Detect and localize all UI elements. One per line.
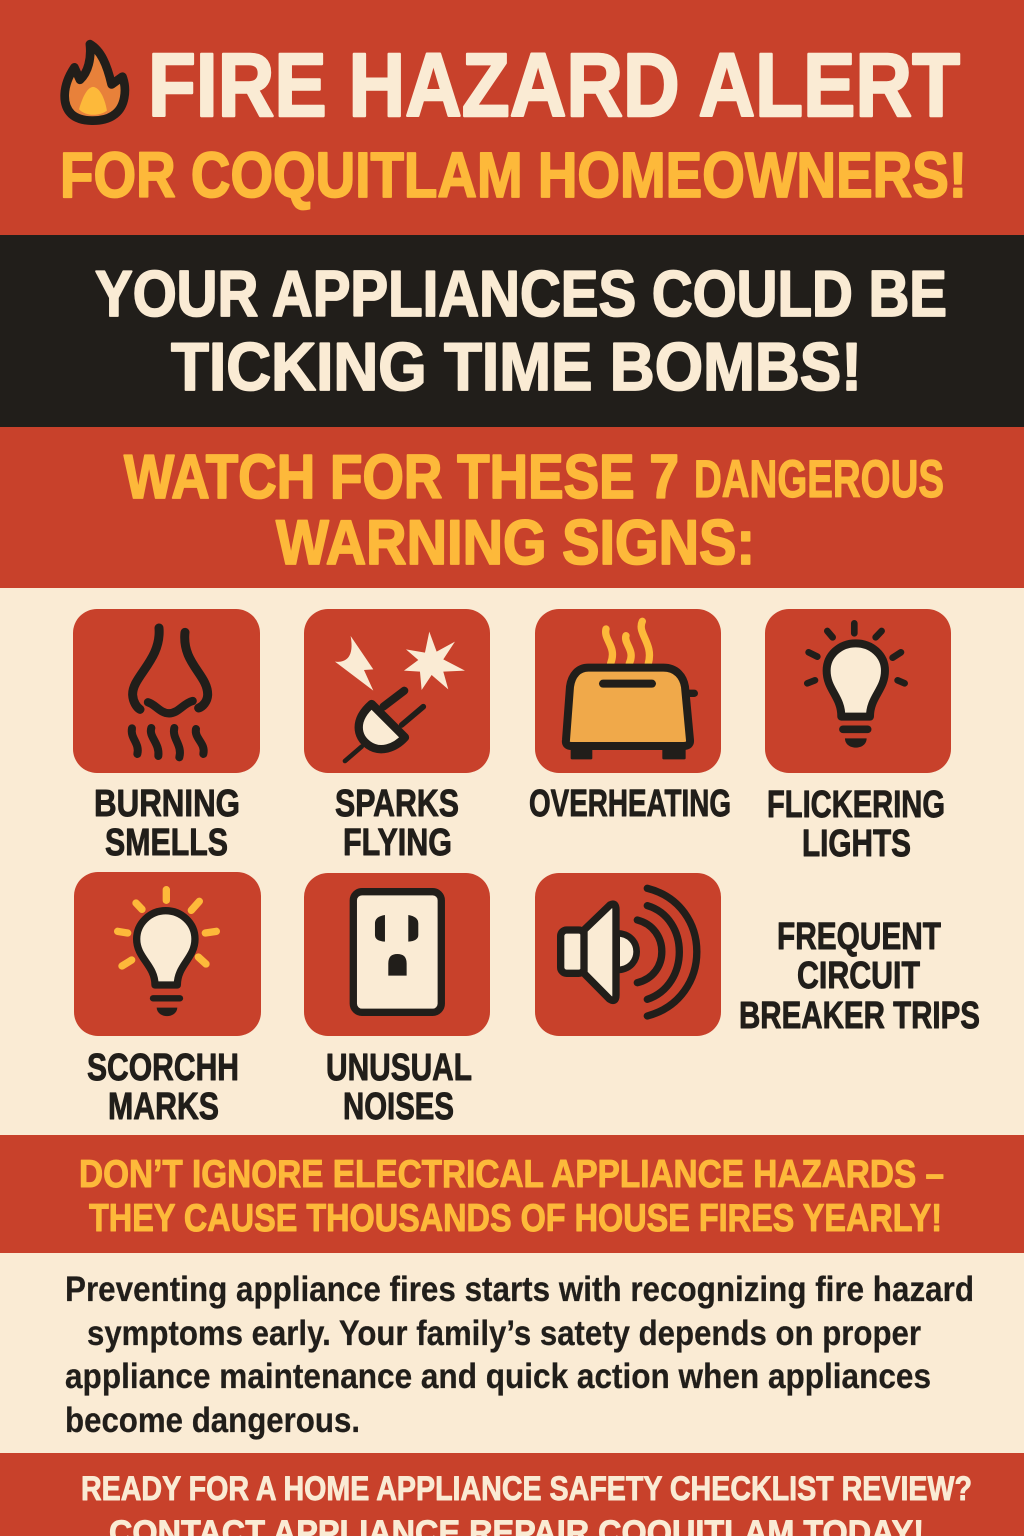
label: scorch marks <box>87 1047 239 1128</box>
label: unusual noises: NOISES <box>343 1086 454 1128</box>
paragraph text <box>65 1270 974 1440</box>
label: sparks flying: SPARKS <box>335 783 459 825</box>
label: frequent circuit breaker trips: CIRCUIT <box>797 955 920 997</box>
label: unusual noises <box>326 1047 472 1128</box>
label: flickering lights: LIGHTS <box>802 823 911 865</box>
icon: overheating toaster <box>535 609 721 773</box>
label: sparks flying: FLYING <box>343 822 452 864</box>
panel: call to action <box>0 1453 1024 1536</box>
paragraph text: appliance maintenance and quick action when appliances <box>65 1357 931 1396</box>
heading line 1: WATCH FOR THESE 7 <box>124 443 679 512</box>
label: overheating: OVERHEATING <box>529 783 731 825</box>
label: burning smells <box>94 783 240 864</box>
paragraph text: become dangerous. <box>65 1401 360 1440</box>
label: frequent circuit breaker trips: FREQUENT <box>777 916 941 958</box>
icon: scorch marks bulb <box>74 872 261 1036</box>
label: scorch marks: MARKS <box>108 1086 219 1128</box>
panel: warning signs grid <box>0 588 1024 1135</box>
panel: header <box>0 0 1024 235</box>
panel: black banner <box>0 235 1024 427</box>
icon: sparks and plug <box>304 609 490 773</box>
label: flickering lights: FLICKERING <box>767 784 945 826</box>
icon: outlet <box>304 873 490 1036</box>
label: frequent circuit breaker trips <box>739 916 980 1037</box>
label: burning smells: BURNING <box>94 783 240 825</box>
label: flickering lights <box>767 784 945 865</box>
paragraph text: symptoms early. Your family’s satety depends on proper <box>87 1314 921 1353</box>
label: scorch marks: SCORCHH <box>87 1047 239 1089</box>
label: burning smells: SMELLS <box>105 822 228 864</box>
icon: flame <box>65 44 125 121</box>
panel: hazard warning strip <box>0 1135 1024 1253</box>
icon: flickering bulb <box>765 609 951 773</box>
panel: prevention paragraph <box>0 1253 1024 1453</box>
heading line 2: WARNING SIGNS: <box>276 508 755 578</box>
label: unusual noises: UNUSUAL <box>326 1047 472 1089</box>
banner line 2: TICKING TIME BOMBS! <box>171 329 862 405</box>
panel: warning heading <box>0 427 1024 588</box>
label: sparks flying <box>335 783 459 864</box>
icon: speaker <box>535 873 721 1036</box>
icon: burning smells nose <box>73 609 260 773</box>
